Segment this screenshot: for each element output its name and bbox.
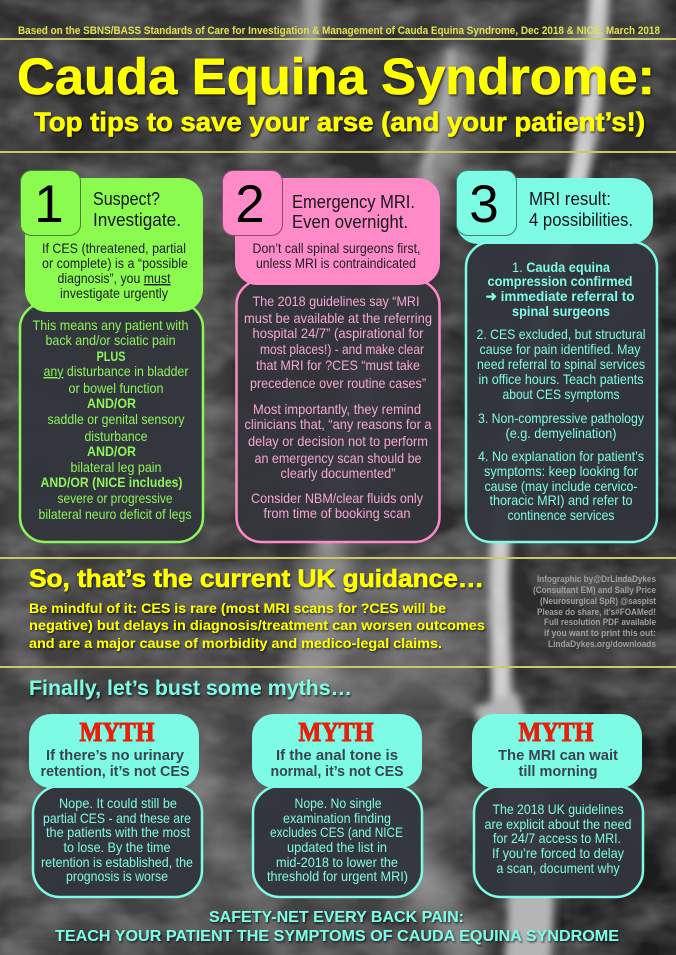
step 3 heading <box>529 189 633 230</box>
myth 1 claim: retention, it’s not CES <box>40 764 190 780</box>
myth 2 answer: mid-2018 to lower the <box>276 854 398 870</box>
panel: step 3 MRI result <box>456 170 657 542</box>
step 1 number badge: 1 <box>34 175 64 234</box>
step 1 criteria text: bilateral leg pain <box>70 459 162 475</box>
credits <box>533 574 656 649</box>
step 1 detail box <box>20 303 203 542</box>
myth 1 claim: If there’s no urinary <box>46 748 184 764</box>
step 1 criteria text: PLUS <box>96 348 126 364</box>
myth 2 claim <box>270 748 404 780</box>
credits: (Neurosurgical SpR) @saspist <box>540 596 656 606</box>
myth 3 claim <box>498 748 618 780</box>
myth 3 answer: The 2018 UK guidelines <box>492 801 624 817</box>
step 2 guideline text: precedence over routine cases” <box>250 375 426 391</box>
step 1 criteria text: AND/OR <box>87 395 136 411</box>
credits: Please do share, it’s#FOAMed! <box>537 607 656 617</box>
guidance text: Be mindful of it: CES is rare (most MRI scans for ?CES will be <box>29 600 446 616</box>
step 3 possibilities text: need referral to spinal services <box>477 356 645 372</box>
step 1 summary: investigate urgently <box>60 285 168 301</box>
step 2 guideline text: delay or decision not to perform <box>248 433 428 449</box>
guidance text <box>29 600 485 651</box>
step 1 criteria text: AND/OR <box>87 443 136 459</box>
myth 3 claim box <box>472 714 642 788</box>
panel: myth 3 <box>472 714 643 897</box>
step 2 summary: Don’t call spinal surgeons first, <box>252 240 420 256</box>
step 3 heading: 4 possibilities. <box>529 210 633 230</box>
myth 3 label: MYTH <box>518 717 594 747</box>
step 2 guideline text: hospital 24/7” (aspirational for <box>252 325 424 341</box>
myth 2 label: MYTH <box>298 717 374 747</box>
step 2 number badge: 2 <box>235 175 265 234</box>
myth 2 answer: threshold for urgent MRI) <box>267 868 408 884</box>
step 2 guideline text: must be available at the referring <box>244 310 432 326</box>
myth 3 answer: If you’re forced to delay <box>492 845 624 861</box>
myth 1 claim box <box>29 714 199 788</box>
step 1 criteria text: saddle or genital sensory <box>48 411 184 427</box>
title: Cauda Equina Syndrome: <box>17 48 655 105</box>
myth 2 answer <box>267 795 408 884</box>
step 1 summary <box>42 240 188 301</box>
step 1 heading: Suspect? <box>93 189 160 209</box>
step 3 possibilities text: in office hours. Teach patients <box>478 371 644 387</box>
step 3 possibilities text: cause for pain identified. May <box>480 341 640 357</box>
step 3 possibilities text: 1. Cauda equina <box>512 259 610 275</box>
myth 3 answer: for 24/7 access to MRI. <box>493 830 621 846</box>
footer call to action <box>55 909 619 945</box>
divider guidance top <box>0 557 676 559</box>
step 2 heading: Emergency MRI. <box>292 192 415 212</box>
credits: Infographic by@DrLindaDykes <box>537 574 656 584</box>
myth 2 answer box <box>253 786 422 897</box>
divider top <box>0 38 676 40</box>
myth 2 answer: Nope. No single <box>294 795 382 811</box>
myth 1 answer: prognosis is worse <box>66 868 168 884</box>
step 3 possibilities text: 3. Non-compressive pathology <box>478 410 644 426</box>
step 1 criteria text: any disturbance in bladder <box>44 363 189 379</box>
step 2 guideline text: Consider NBM/clear fluids only <box>251 490 423 506</box>
step 3 possibilities text: 4. No explanation for patient’s <box>478 448 644 464</box>
step 1 criteria text: This means any patient with <box>32 317 188 333</box>
credits: if you want to print this out: <box>544 628 656 638</box>
step 2 guideline text <box>244 293 432 521</box>
step 1 criteria text: bilateral neuro deficit of legs <box>38 506 192 522</box>
divider lower <box>0 151 676 153</box>
step 2 guideline text: that MRI for ?CES “must take <box>256 357 420 373</box>
step 3 heading: MRI result: <box>529 189 611 209</box>
myth 3 answer box <box>474 786 643 897</box>
guidance text: and are a major cause of morbidity and medico-legal claims. <box>29 635 442 651</box>
step 2 detail box <box>236 280 440 542</box>
subtitle: Top tips to save your arse (and your patient’s!) <box>34 107 645 137</box>
footer call to action: TEACH YOUR PATIENT THE SYMPTOMS OF CAUDA EQUINA SYNDROME <box>55 928 619 945</box>
step 3 number badge <box>456 170 516 236</box>
step 2 guideline text: from time of booking scan <box>264 505 410 521</box>
myths heading: Finally, let’s bust some myths… <box>29 677 352 700</box>
step 2 heading: Even overnight. <box>292 212 408 232</box>
myth 3 claim: The MRI can wait <box>498 748 618 764</box>
step 1 summary: or complete) is a “possible <box>42 255 188 271</box>
step 3 header box <box>456 178 653 244</box>
step 1 number badge <box>20 170 80 236</box>
myth 1 answer: the patients with the most <box>46 824 190 840</box>
step 3 detail box <box>466 242 657 542</box>
panel: myth 2 <box>252 714 422 897</box>
step 3 possibilities text: spinal surgeons <box>512 303 610 319</box>
myth 1 answer: Nope. It could still be <box>59 795 177 811</box>
myth 2 claim: If the anal tone is <box>276 748 398 764</box>
step 1 header box <box>25 178 203 312</box>
step 2 guideline text: The 2018 guidelines say “MRI <box>252 293 420 309</box>
myth 1 answer <box>41 795 193 884</box>
step 3 possibilities text: symptoms: keep looking for <box>484 463 638 479</box>
step 2 number badge <box>222 170 282 236</box>
footer call to action: SAFETY-NET EVERY BACK PAIN: <box>209 909 464 926</box>
step 3 possibilities text: about CES symptoms <box>502 386 620 402</box>
step 2 guideline text: clinicians that, “any reasons for a <box>244 416 432 432</box>
step 1 criteria text: severe or progressive <box>58 490 173 506</box>
credits: LindaDykes.org/downloads <box>548 639 656 649</box>
myth 1 answer: retention is established, the <box>41 854 193 870</box>
step 1 heading <box>93 189 181 230</box>
myth 2 answer: updated the list in <box>287 839 387 855</box>
step 2 heading <box>292 192 415 232</box>
myth 2 answer: excludes CES (and NICE <box>270 824 403 840</box>
panel: step 1 suspect, investigate <box>20 170 203 542</box>
step 3 possibilities text: (e.g. demyelination) <box>506 425 616 441</box>
step 2 summary <box>252 240 420 271</box>
step 3 possibilities text: thoracic MRI) and refer to <box>490 492 633 508</box>
panel: step 2 emergency MRI <box>222 170 440 542</box>
step 2 summary: unless MRI is contraindicated <box>256 255 416 271</box>
divider myths top <box>0 666 676 668</box>
step 3 possibilities text <box>476 259 646 523</box>
step 3 possibilities text: compression confirmed <box>488 273 632 289</box>
credits: Full resolution PDF available <box>544 617 656 627</box>
myth 1 answer: to lose. By the time <box>64 839 171 855</box>
step 1 criteria text: back and/or sciatic pain <box>46 332 176 348</box>
myth 3 answer: are explicit about the need <box>484 816 632 832</box>
step 1 summary: diagnosis”, you must <box>58 270 171 286</box>
myth 1 label: MYTH <box>80 717 154 747</box>
credits: (Consultant EM) and Sally Price <box>533 585 656 595</box>
step 1 criteria text <box>32 317 192 522</box>
myth 2 claim: normal, it’s not CES <box>270 764 404 780</box>
myth 3 answer <box>484 801 632 876</box>
step 3 number badge: 3 <box>469 175 499 234</box>
step 1 criteria text: disturbance <box>84 428 148 444</box>
step 2 guideline text: clearly documented” <box>280 465 396 481</box>
step 3 possibilities text: continence services <box>508 507 614 523</box>
step 2 header box <box>235 178 440 285</box>
panel: myth 1 <box>29 714 202 897</box>
step 3 possibilities text: cause (may include cervico- <box>484 478 638 494</box>
myth 2 claim box <box>252 714 422 788</box>
step 3 possibilities text: 2. CES excluded, but structural <box>476 326 646 342</box>
step 1 heading: Investigate. <box>93 210 181 230</box>
step 2 guideline text: most places!) - and make clear <box>260 341 424 357</box>
myth 1 claim <box>40 748 190 780</box>
myth 2 answer: examination finding <box>283 810 391 826</box>
step 1 criteria text: or bowel function <box>68 380 164 396</box>
step 2 guideline text: an emergency scan should be <box>254 450 422 466</box>
step 3 possibilities text: ➜ immediate referral to <box>486 288 634 304</box>
myth 3 claim: till morning <box>518 764 598 780</box>
myth 1 answer: partial CES - and these are <box>43 810 191 826</box>
guidance heading: So, that’s the current UK guidance… <box>29 565 484 593</box>
step 1 criteria text: AND/OR (NICE includes) <box>40 474 182 490</box>
guidance text: negative) but delays in diagnosis/treatment can worsen outcomes <box>29 617 485 633</box>
step 2 guideline text: Most importantly, they remind <box>253 401 421 417</box>
myth 3 answer: a scan, document why <box>496 860 620 876</box>
step 1 summary: If CES (threatened, partial <box>42 240 186 256</box>
myth 1 answer box <box>33 786 202 897</box>
